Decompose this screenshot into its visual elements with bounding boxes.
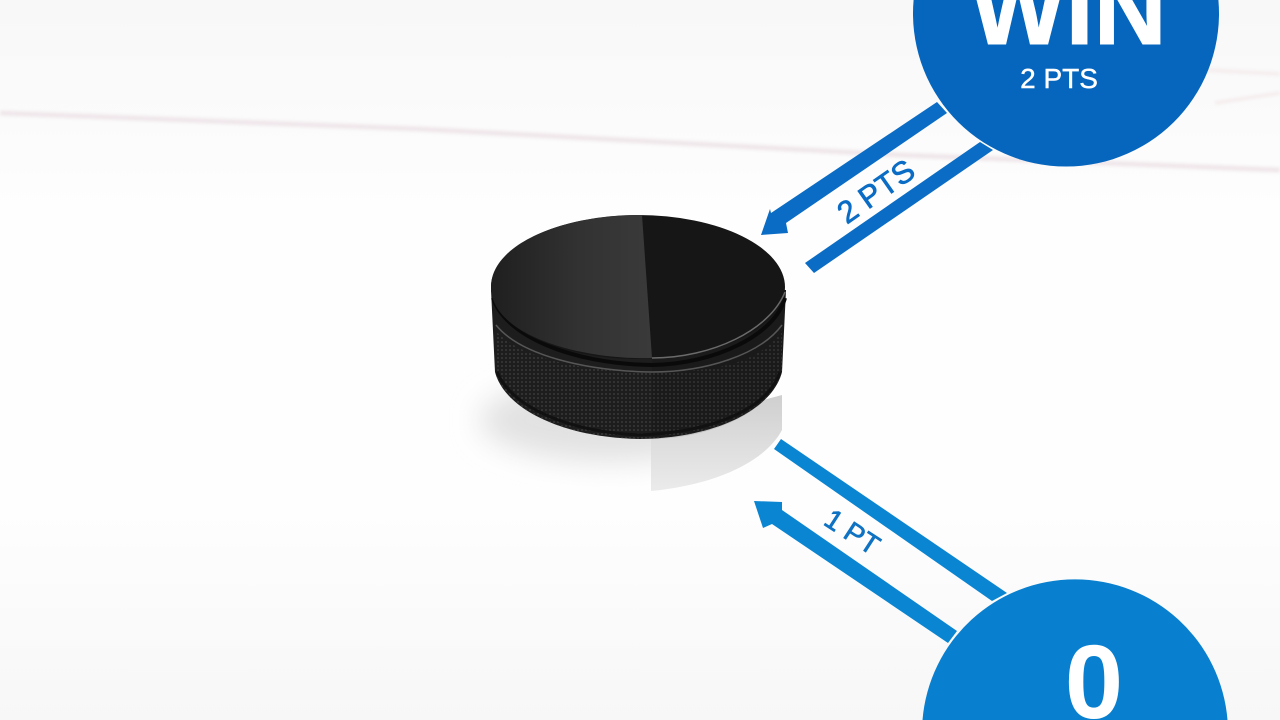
puck side <box>491 290 786 439</box>
arrow: overtime to puck <box>754 439 1007 643</box>
arrow: win to puck <box>761 102 993 273</box>
zero circle <box>922 579 1228 720</box>
puck shadow <box>480 378 782 491</box>
hockey puck <box>491 215 786 439</box>
puck rim line <box>496 325 782 372</box>
arrow label: 1 pt: 1 PT <box>819 503 885 561</box>
win points: 2 PTS <box>1020 63 1098 94</box>
arrow label: 2 pts: 2 PTS <box>831 152 921 230</box>
win circle <box>913 0 1219 167</box>
puck top face <box>491 215 785 359</box>
